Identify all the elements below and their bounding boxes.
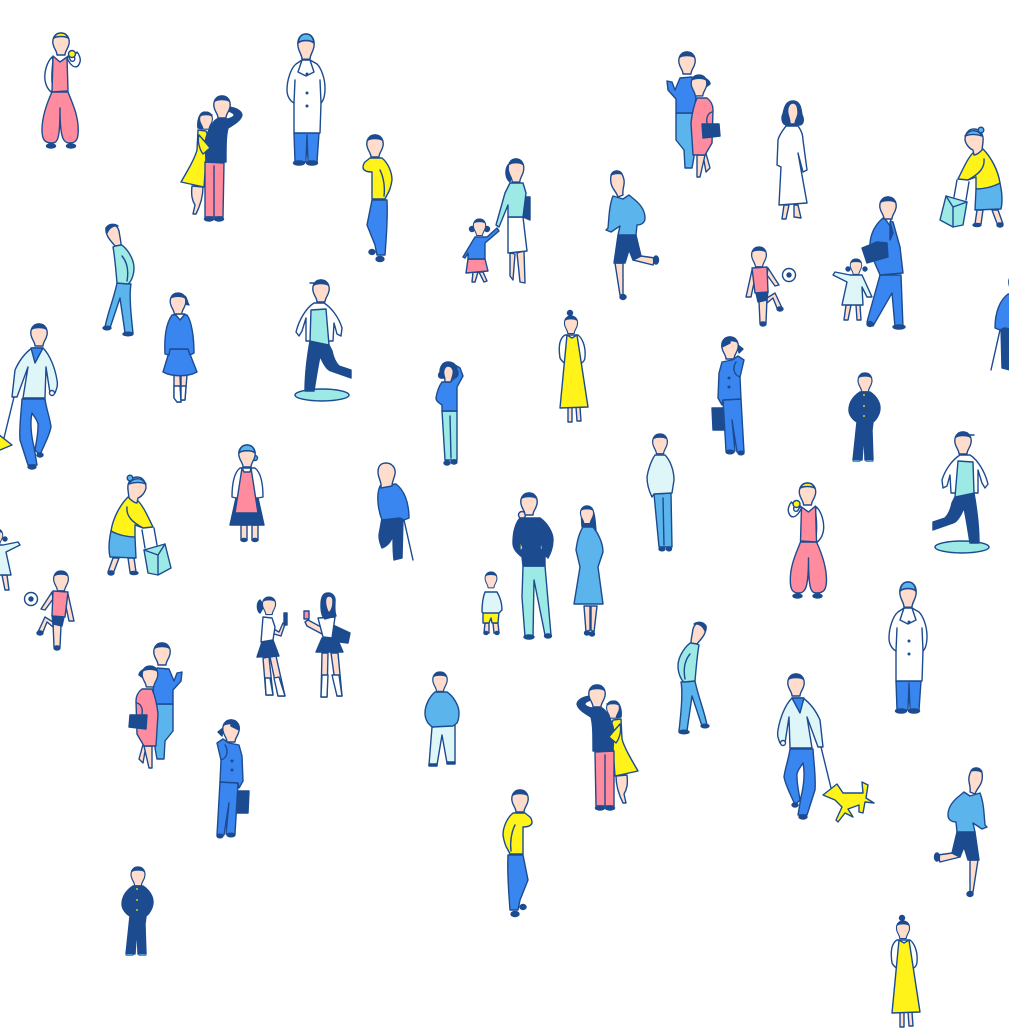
figure: mirrored little girl, clipped at left edge xyxy=(0,529,20,590)
figure: man in yellow on the phone xyxy=(363,135,392,262)
figure: mirrored dog walker, clipped at left edge xyxy=(0,324,57,472)
figure: man in sky sweater and pale trousers xyxy=(425,672,459,766)
figure: old woman with suitcase xyxy=(108,475,171,575)
figure: couple with handbag xyxy=(667,52,720,177)
figure: woman in pink apron xyxy=(230,445,264,542)
figure: skater with white jacket xyxy=(933,432,989,553)
figure: navy uniform boy copy xyxy=(122,867,153,956)
figure: little boy in yellow shorts xyxy=(482,572,502,634)
figure: yellow dress copy xyxy=(891,916,920,1027)
figure: little girl in pale dress xyxy=(833,259,872,320)
figure: man in pale shirt and sky trousers xyxy=(647,434,674,551)
figure: man in pale sweater walking dog xyxy=(778,674,874,822)
figure: doctor copy xyxy=(889,582,927,713)
figure: schoolgirl in blue uniform xyxy=(163,293,197,402)
figure: walking man in mint top xyxy=(103,224,134,336)
figure: schoolgirl taking a photo xyxy=(257,597,287,696)
figure: boy kicking soccer ball xyxy=(746,247,796,326)
figure: mother and child holding hands xyxy=(463,159,530,283)
figure: businesswoman on phone with briefcase xyxy=(712,337,744,455)
figure: mirrored runner xyxy=(606,171,658,300)
figure: old man with cane xyxy=(378,463,413,560)
figure: mirrored man on the phone xyxy=(503,790,532,916)
child xyxy=(463,219,499,282)
figure: businessman carrying bag xyxy=(862,197,905,329)
figure: mirrored old woman with suitcase xyxy=(940,127,1003,227)
figure: mirrored skater xyxy=(295,280,351,401)
figure: runner in sky hoodie xyxy=(934,768,987,896)
figure: schoolgirl with drink and shoulder bag xyxy=(304,593,350,697)
figure: mirrored hugging couple xyxy=(577,685,638,810)
figure: doctor in white coat xyxy=(287,34,325,165)
figure: man in pink harem trousers xyxy=(42,33,80,148)
figure: hugging couple xyxy=(181,96,242,221)
figure: woman in blue with hand on head xyxy=(436,362,463,465)
figure: woman in sky dress xyxy=(574,506,603,636)
figure: woman in long white dress xyxy=(777,101,807,219)
figure: mirrored walking man xyxy=(678,622,709,734)
figure: mirrored old man with cane, clipped at right edge xyxy=(991,273,1009,370)
figure: woman in long yellow dress xyxy=(559,310,588,422)
figure: mirrored boy with soccer ball xyxy=(24,571,74,650)
figure: mirrored man in pink harem trousers xyxy=(788,483,826,598)
figure: mirrored businesswoman on phone xyxy=(217,720,249,838)
figure: boy in navy school uniform xyxy=(849,373,880,462)
figure: man in navy sweater xyxy=(513,493,553,639)
figure: mirrored couple with handbag xyxy=(129,643,182,768)
